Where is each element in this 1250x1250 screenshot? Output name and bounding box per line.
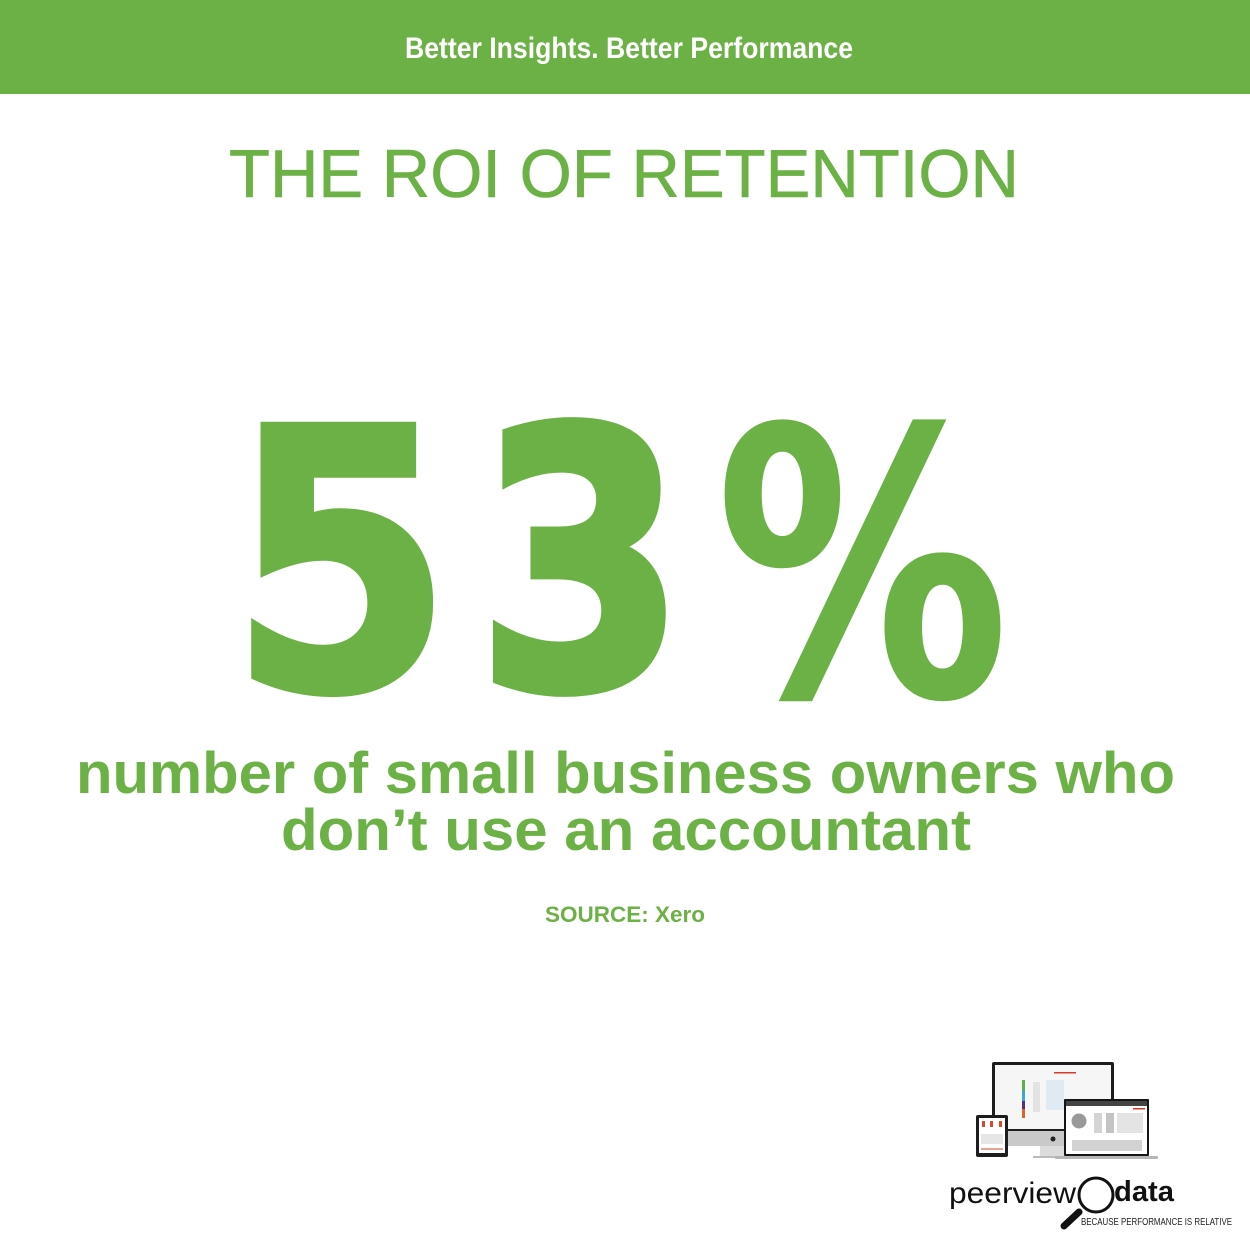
wordmark: data: data	[1114, 1176, 1175, 1208]
icon: magnifying glass	[1064, 1178, 1113, 1226]
big statistic: 53%: 3	[477, 356, 686, 771]
header tagline: Better Insights. Better Performance	[405, 32, 853, 65]
statistic description	[76, 741, 1175, 863]
source: SOURCE: Xero	[545, 902, 705, 927]
wordmark: peerview: peerview	[949, 1177, 1076, 1210]
monitor	[992, 1062, 1114, 1158]
big statistic: 53%: %	[716, 352, 1009, 783]
tablet	[976, 1115, 1008, 1157]
big statistic: 53%	[229, 352, 1009, 783]
big statistic: 53%: 5	[229, 353, 453, 775]
laptop	[1055, 1099, 1158, 1159]
statistic description: don’t use an accountant	[281, 798, 971, 863]
title: THE ROI OF RETENTION	[229, 136, 1019, 212]
statistic description: number of small business owners who	[76, 741, 1175, 806]
logo: peerview data	[949, 1176, 1232, 1228]
header band	[0, 0, 1250, 94]
icon: device mockups	[976, 1062, 1158, 1159]
